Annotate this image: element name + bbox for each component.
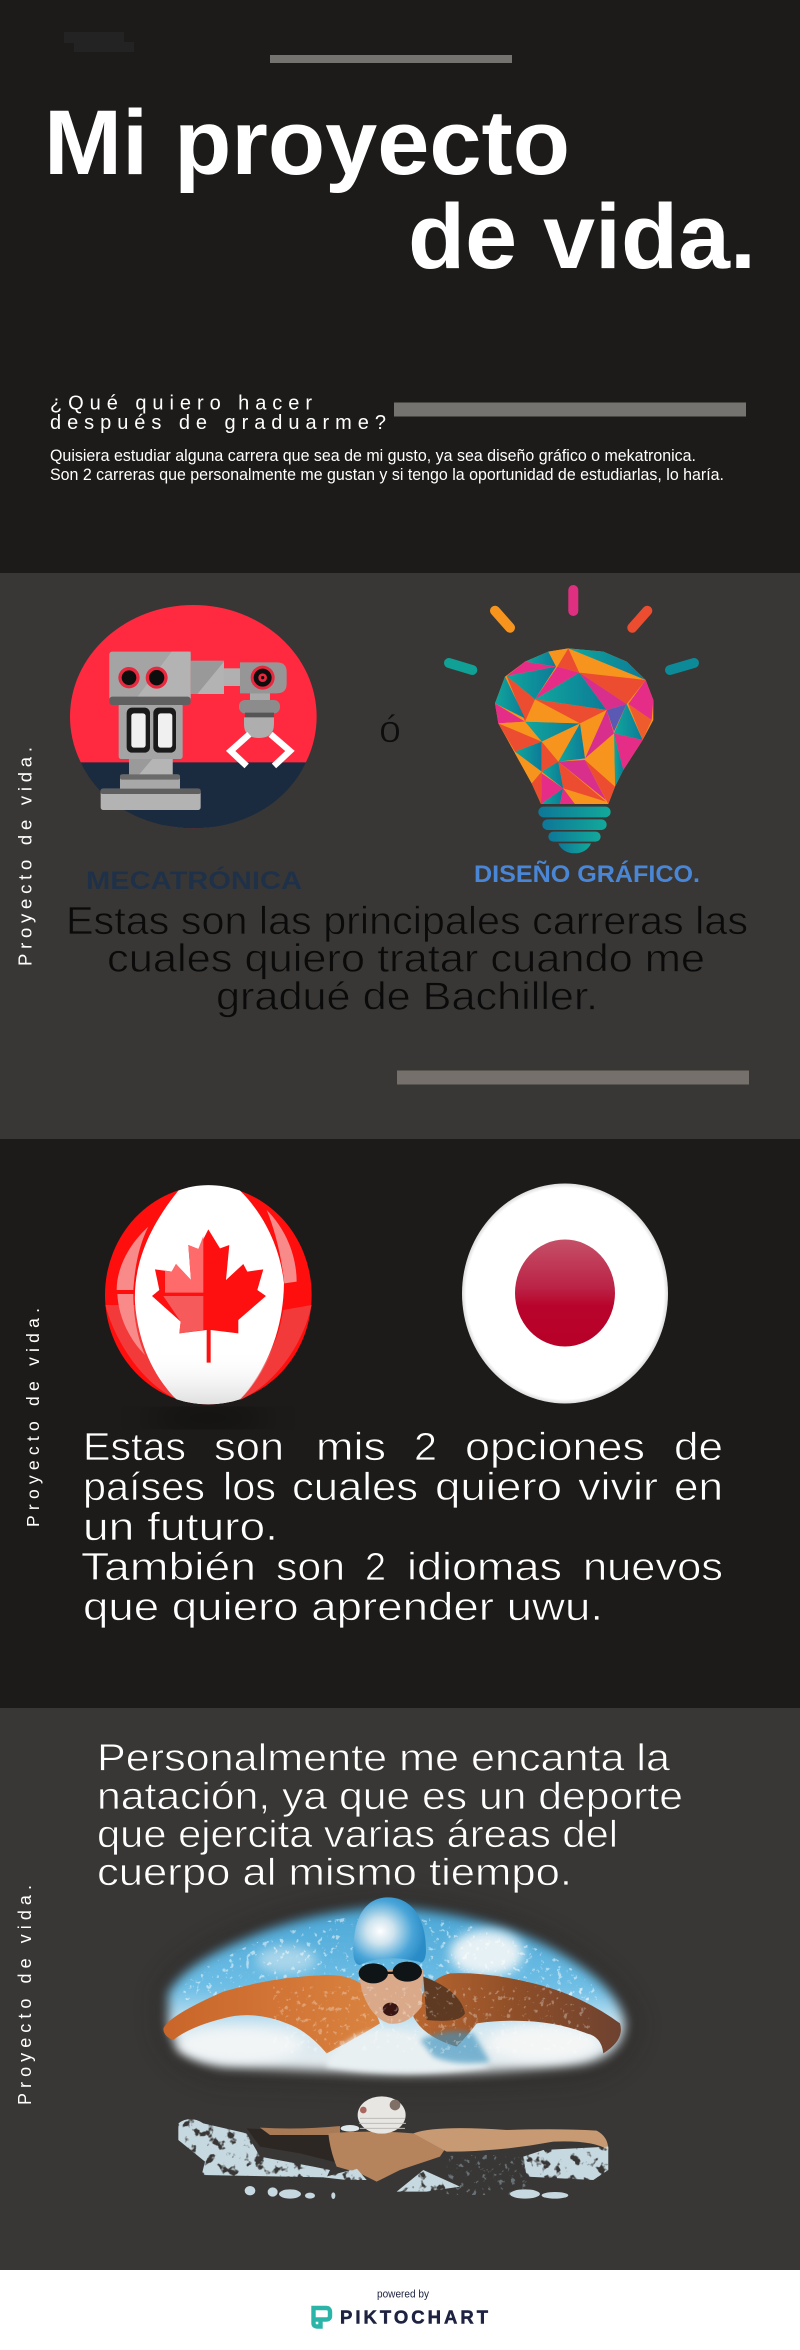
- countries caption: [81, 1426, 723, 1629]
- flag: Canada: [105, 1185, 312, 1425]
- countries caption: quiero: [435, 1466, 562, 1509]
- panel: swimming: [0, 1708, 800, 2270]
- vertical label: Proyecto de vida.: [15, 1885, 35, 2105]
- question heading: [50, 392, 386, 434]
- countries caption: países: [83, 1466, 205, 1509]
- question heading: después de graduarme?: [50, 412, 386, 434]
- swimming caption: que ejercita varias áreas del: [97, 1814, 618, 1856]
- panel: intro: [0, 0, 800, 573]
- countries caption: nuevos: [583, 1546, 723, 1589]
- careers caption: Estas son las principales carreras las: [66, 900, 748, 943]
- footer: piktochart: powered by: [377, 2288, 429, 2300]
- countries caption: un futuro.: [83, 1506, 278, 1549]
- panel: countries: [0, 1139, 800, 1708]
- swimming caption: cuerpo al mismo tiempo.: [97, 1852, 572, 1894]
- countries caption: son: [276, 1546, 345, 1589]
- countries caption: También: [81, 1546, 256, 1589]
- title: [44, 92, 756, 288]
- vertical label: Proyecto de vida.: [14, 747, 36, 966]
- countries caption: que quiero aprender uwu.: [83, 1586, 603, 1629]
- vertical label: Proyecto de vida.: [23, 1308, 43, 1527]
- footer: piktochart: [0, 2270, 800, 2350]
- icon: polygon lightbulb: [449, 590, 694, 853]
- countries caption: vivir: [578, 1466, 658, 1509]
- photo: butterfly swimmer: [153, 1890, 643, 2093]
- countries caption: 2: [365, 1546, 386, 1589]
- question heading: ¿Qué quiero hacer: [50, 392, 312, 414]
- title: de vida.: [408, 186, 756, 288]
- countries caption: los: [223, 1466, 276, 1509]
- careers caption: [66, 900, 748, 1018]
- swimming caption: Personalmente me encanta la: [97, 1738, 671, 1780]
- icon: robot arm: [70, 605, 317, 828]
- icon: piktochart logo: [314, 2308, 330, 2326]
- countries caption: Estas: [83, 1426, 186, 1469]
- intro paragraph: Son 2 carreras que personalmente me gustan y si tengo la oportunidad de estudiarlas, lo haría.: [50, 466, 724, 484]
- countries caption: 2: [414, 1426, 437, 1469]
- connector: ó: ó: [379, 709, 401, 751]
- photo: swimmer from behind: [178, 2096, 608, 2199]
- label: diseño gráfico: DISEÑO GRÁFICO.: [474, 860, 700, 888]
- flag: Japan: [462, 1184, 668, 1404]
- title: Mi proyecto: [44, 92, 570, 194]
- panel: careers: [0, 573, 800, 1139]
- intro paragraph: Quisiera estudiar alguna carrera que sea de mi gusto, ya sea diseño gráfico o mekatronica.: [50, 447, 696, 465]
- swimming caption: [97, 1738, 683, 1894]
- countries caption: mis: [316, 1426, 386, 1469]
- label: mecatrónica: MECATRÓNICA: [86, 865, 302, 895]
- footer: piktochart: PIKTOCHART: [340, 2307, 489, 2328]
- countries caption: idiomas: [407, 1546, 562, 1589]
- careers caption: gradué de Bachiller.: [216, 976, 598, 1018]
- swimming caption: natación, ya que es un deporte: [97, 1776, 683, 1818]
- countries caption: de: [674, 1426, 723, 1469]
- countries caption: opciones: [465, 1426, 645, 1469]
- careers caption: cuales quiero tratar cuando me: [107, 938, 705, 980]
- countries caption: cuales: [292, 1466, 418, 1509]
- countries caption: en: [674, 1466, 723, 1509]
- countries caption: son: [214, 1426, 284, 1469]
- intro paragraph: [50, 447, 724, 484]
